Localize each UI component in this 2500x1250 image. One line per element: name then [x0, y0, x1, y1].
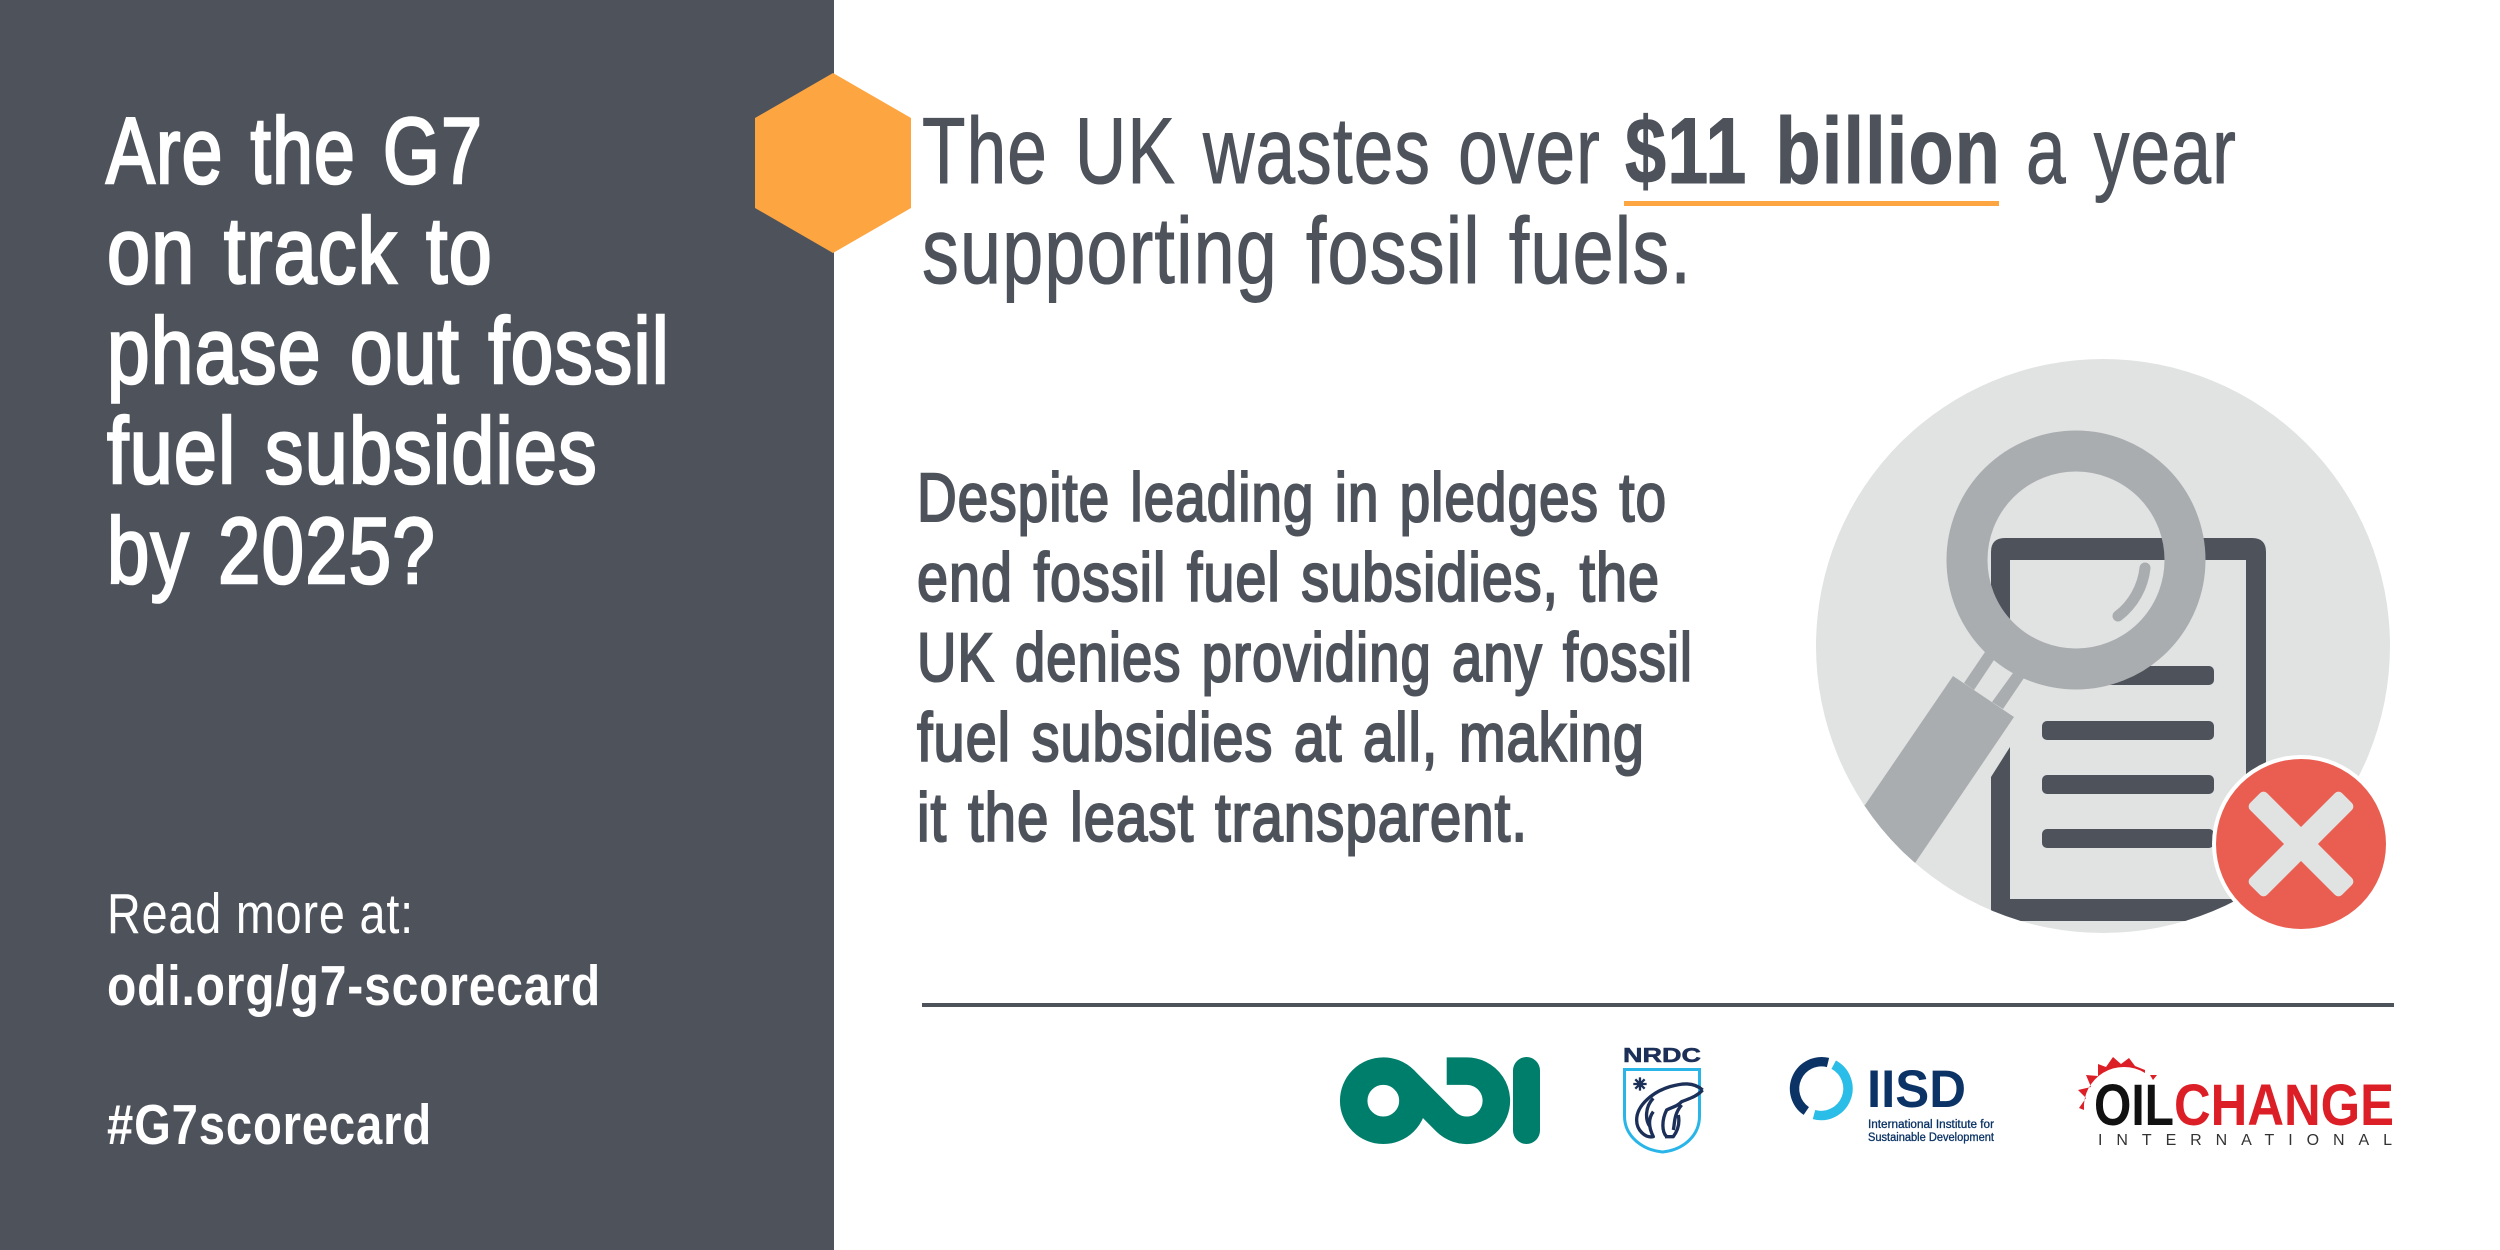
logo: IISD: [1795, 1060, 1995, 1144]
logo: Oil Change International: INTERNATIONAL: [2098, 1132, 2392, 1149]
divider line: [922, 1003, 2394, 1007]
text: body paragraph: it the least transparent.: [917, 779, 1528, 856]
icon: background circle: [1816, 359, 2390, 933]
heading: UK headline: supporting fossil fuels.: [922, 198, 1692, 303]
heading: UK headline: The UK wastes over: [922, 98, 1601, 203]
heading: question: [106, 98, 670, 603]
text: read more link: [107, 882, 601, 1018]
panel: left sidebar: [0, 0, 834, 1250]
logo: NRDC: NRDC: [1623, 1045, 1701, 1067]
logo: NRDC: [1623, 1045, 1703, 1152]
logo: Oil Change International: CHANGE: [2174, 1073, 2394, 1138]
logo: IISD: Sustainable Development: [1868, 1132, 1995, 1144]
text: body paragraph: fuel subsidies at all, making: [917, 699, 1645, 776]
text: body paragraph: [917, 459, 1693, 856]
logo: IISD: IISD: [1867, 1060, 1966, 1119]
logo: Oil Change International: OIL: [2094, 1073, 2174, 1138]
icon: document outline: [1991, 538, 2266, 921]
heading: question: by 2025?: [107, 498, 436, 603]
heading: question: fuel subsidies: [107, 398, 598, 503]
text: body paragraph: end fossil fuel subsidies, the: [917, 539, 1660, 616]
logo: IISD: International Institute for: [1868, 1119, 1994, 1131]
heading: question: Are the G7: [106, 98, 483, 203]
heading: question: on track to: [107, 198, 493, 303]
heading: UK headline: a year: [2026, 98, 2237, 203]
underline: $11 billion: [1624, 201, 1999, 206]
text: read more link: Read more at:: [107, 882, 414, 946]
icon: red cross badge: [2209, 752, 2393, 936]
text: read more link: odi.org/g7-scorecard: [107, 954, 601, 1018]
heading: UK headline: [922, 98, 2237, 303]
icon: orange hexagon: [755, 73, 911, 253]
heading: question: phase out fossil: [107, 298, 670, 403]
text: body paragraph: Despite leading in pledges to: [917, 459, 1667, 536]
text: body paragraph: UK denies providing any fossil: [917, 619, 1693, 696]
text: hashtag: #G7scorecard: [107, 1093, 432, 1157]
heading: UK headline: $11 billion: [1625, 98, 2001, 203]
logo: Oil Change International: [2078, 1057, 2394, 1149]
icon: magnifying glass: [1833, 451, 2185, 863]
icon: document under magnifying glass with rejection badge: [1816, 359, 2393, 936]
logo: ODI: [1354, 1057, 1540, 1144]
